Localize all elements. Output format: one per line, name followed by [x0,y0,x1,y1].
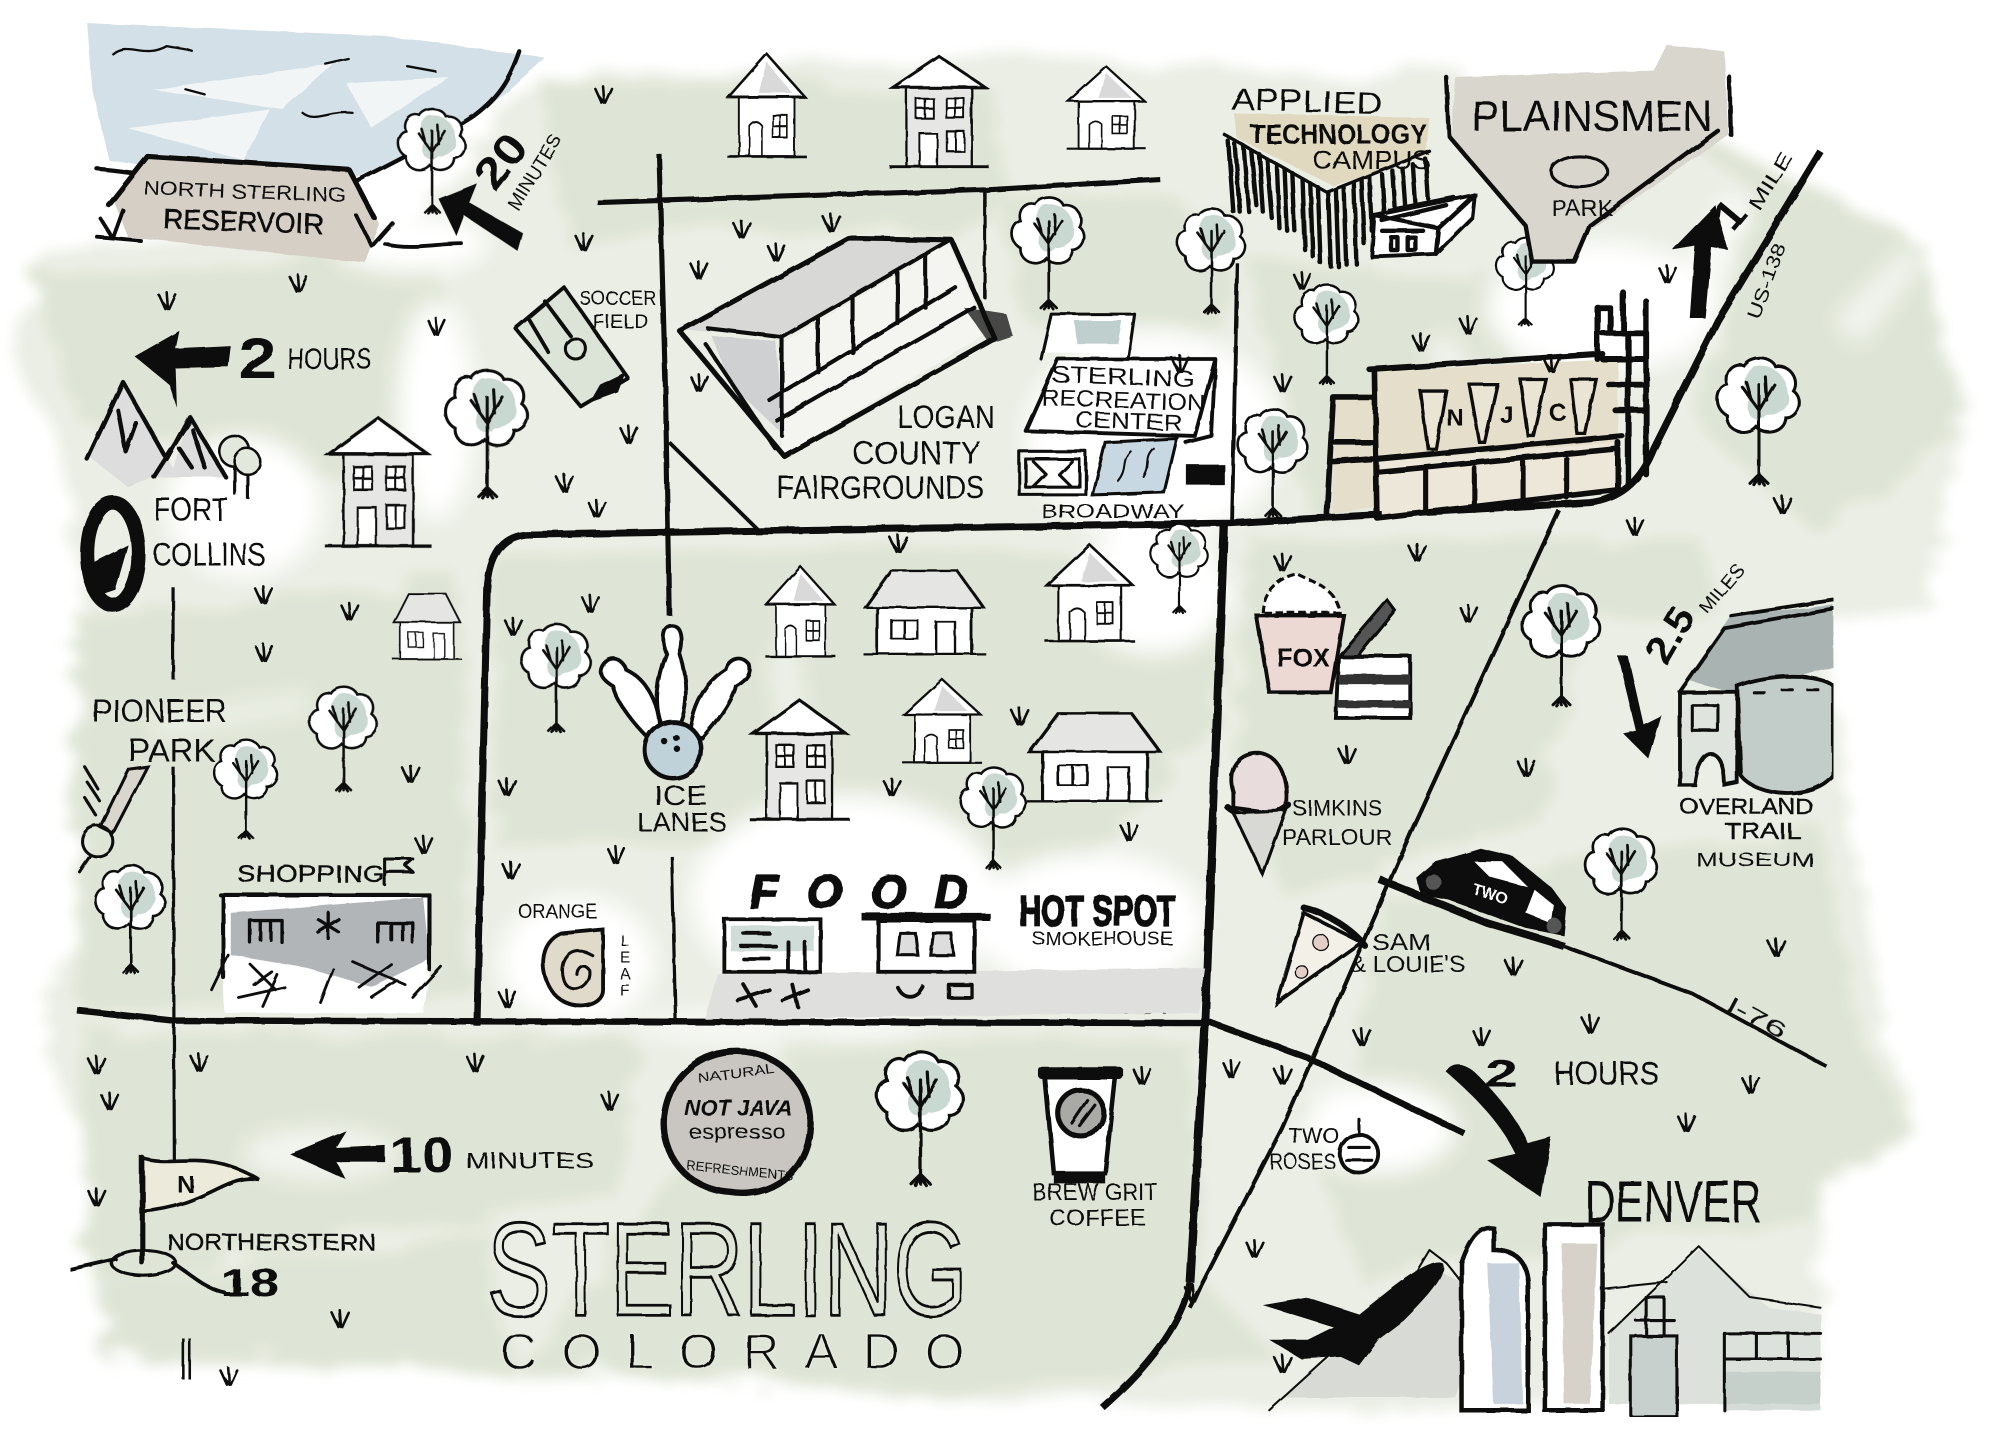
title: Sterling Colorado: COLORADO [500,1323,964,1380]
arrow and label: 20 minutes [438,124,567,251]
car on I-76 [1417,849,1567,936]
Overland Trail Museum: OVERLAND [1679,794,1813,819]
NJC building: J [1500,402,1514,429]
lake: North Sterling Reservoir water [87,23,545,204]
label: Logan County Fairgrounds: LOGAN [897,399,995,435]
grass tufts [88,86,1791,1385]
Food label and shops [705,866,1205,1019]
arrow and label: 2.5 miles: MILES [1695,560,1749,618]
arrow and label: 2 hours west [135,327,372,408]
bowling pins and ball: Ice Lanes: ICE [654,779,708,811]
Northeastern 18 flag: N [177,1171,195,1198]
sign: North Sterling Reservoir: RESERVOIR [163,202,324,240]
label: Logan County Fairgrounds: FAIRGROUNDS [777,470,985,506]
arrow and label: 2 hours west: HOURS [287,341,372,376]
Not Java Espresso badge: espresso [688,1120,786,1143]
soccer field: SOCCER [579,287,656,310]
sign: North Sterling Reservoir [97,156,462,263]
Denver label: DENVER [1585,1170,1762,1235]
soccer field: FIELD [592,312,649,333]
Brew Grit Coffee: COFFEE [1049,1205,1146,1231]
Pioneer Park label and bat icon: PIONEER [92,693,227,729]
Pioneer Park label and bat icon: PARK [128,733,216,769]
Sterling Recreation Center: CENTER [1074,406,1183,436]
Sam and Louie's pizza slice: SAM [1372,929,1431,955]
Two Roses label and icon: TWO [1288,1124,1340,1149]
arrow and label: 1 mile [1672,149,1797,318]
Not Java Espresso badge: REFRESHMENTS [686,1157,794,1183]
Not Java Espresso badge: NOT JAVA [685,1095,792,1120]
Not Java Espresso badge [664,1051,811,1193]
NJC building [1327,292,1646,518]
houses [325,54,1163,819]
Applied Technology Campus [1224,81,1474,267]
road labels: US-138 [1744,240,1791,322]
arrow and label: 2.5 miles: 2.5 [1637,599,1704,671]
Overland Trail Museum: TRAIL [1724,818,1801,843]
arrow and label: 10 minutes: MINUTES [465,1148,594,1173]
Simkins Parlour ice cream [1228,753,1392,874]
arrow and label: 1 mile: 1 [1704,190,1757,240]
arrow and label: 1 mile: MILE [1745,149,1797,214]
sign: Plainsmen Park: PARK [1551,195,1613,220]
Applied Technology Campus: TECHNOLOGY [1250,118,1427,150]
Fox theater popcorn and clapper: FOX [1277,645,1330,673]
mountains icon [87,382,260,497]
Denver skyline and mountains [1269,1224,1821,1417]
Food label and shops: FOOD [750,866,968,918]
arrow and label: 2.5 miles [1618,560,1749,759]
Not Java Espresso badge: NATURAL [697,1060,775,1086]
Two Roses label and icon: ROSES [1269,1149,1336,1174]
bowling pins and ball: Ice Lanes: LANES [637,809,727,837]
Applied Technology Campus: CAMPUS [1313,147,1431,175]
Northeastern 18 flag [71,1158,376,1305]
Fox theater popcorn and clapper [1256,574,1410,718]
roads [77,151,1827,1408]
road labels: BROADWAY [1041,502,1185,523]
Simkins Parlour ice cream: SIMKINS [1292,795,1382,820]
sign: North Sterling Reservoir: NORTH STERLING [143,178,347,207]
arrow and label: 2 hours to Denver [1446,1053,1659,1197]
arrow and label: 10 minutes: 10 [390,1129,454,1183]
arrow and label: 10 minutes [290,1129,594,1183]
title: Sterling Colorado [487,1195,968,1380]
Brew Grit Coffee [1032,1067,1158,1231]
Fort Collins logo and label: FORT [154,492,228,528]
Sam and Louie's pizza slice [1277,908,1465,1003]
Brew Grit Coffee: BREW GRIT [1032,1179,1158,1206]
Orange Leaf logo: L [621,933,630,950]
road labels [1041,240,1791,1044]
Overland Trail Museum: MUSEUM [1696,851,1814,872]
Two Roses label and icon [1269,1119,1378,1174]
trees [95,109,1799,1185]
Overland Trail Museum [1679,600,1833,872]
title: Sterling Colorado: STERLING [487,1195,968,1344]
label: Logan County Fairgrounds: COUNTY [853,435,981,471]
sign: Plainsmen Park: PLAINSMEN [1472,93,1713,141]
Northeastern 18 flag: NORTHERSTERN [167,1229,376,1255]
Northeastern 18 flag: 18 [221,1262,279,1305]
Sterling Recreation Center [1019,314,1224,495]
NJC building: N [1446,405,1464,432]
Hot Spot Smokehouse: SMOKEHOUSE [1032,929,1173,950]
arrow and label: 20 minutes: 20 [465,124,537,198]
Fort Collins logo and label: COLLINS [153,536,265,572]
road labels: I-76 [1722,991,1790,1044]
NJC building: C [1549,400,1566,427]
Fort Collins logo and label [87,492,265,605]
label: Logan County Fairgrounds [777,399,995,506]
arrow and label: 2 hours to Denver: HOURS [1554,1056,1659,1093]
Orange Leaf logo [518,900,632,1005]
Orange Leaf logo: A [621,967,632,984]
shopping center: SHOPPING [237,861,385,888]
shopping center [212,859,441,1013]
Applied Technology Campus: APPLIED [1231,81,1383,121]
sign: Plainsmen Park [1446,45,1731,263]
Pioneer Park label and bat icon [79,693,227,872]
Orange Leaf logo: E [621,950,631,967]
arrow and label: 2 hours west: 2 [238,327,277,390]
bowling pins and ball: Ice Lanes [601,626,749,837]
road labels: MAIN ST [1062,996,1176,1019]
Hot Spot Smokehouse [1019,888,1176,950]
car on I-76: TWO [1471,881,1510,909]
arrow and label: 2 hours to Denver: 2 [1485,1053,1518,1096]
arrow and label: 20 minutes: MINUTES [504,131,567,214]
airplane icon [1263,1262,1443,1365]
Hot Spot Smokehouse: HOT SPOT [1019,888,1176,935]
Logan County Fairgrounds building [679,192,1013,456]
Sterling Recreation Center: RECREATION [1041,384,1206,416]
Orange Leaf logo: ORANGE [518,900,597,923]
Sterling Recreation Center: STERLING [1051,361,1196,392]
Simkins Parlour ice cream: PARLOUR [1282,825,1392,850]
Sam and Louie's pizza slice: & LOUIE'S [1350,951,1465,977]
Orange Leaf logo: F [621,983,630,1000]
soccer field [515,287,656,406]
